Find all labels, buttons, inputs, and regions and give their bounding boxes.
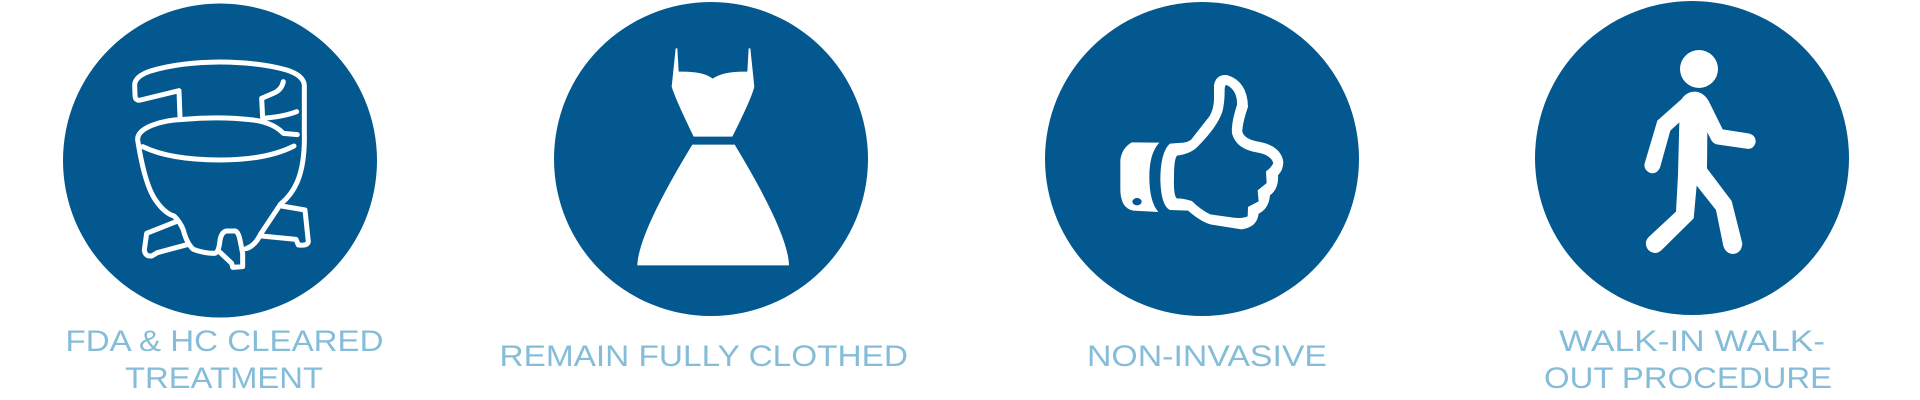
icon circle: clothed xyxy=(554,2,868,316)
icon: walking person xyxy=(1644,50,1756,254)
label: remain fully clothed: REMAIN FULLY CLOTHED xyxy=(500,340,908,373)
panel: remain fully clothed xyxy=(500,2,908,373)
label: FDA and HC cleared treatment xyxy=(66,325,384,395)
icon: treatment applicator outline xyxy=(135,62,308,267)
panel: walk-in walk-out procedure xyxy=(1535,1,1849,395)
label: non-invasive: NON-INVASIVE xyxy=(1087,340,1327,373)
label: walk-in walk-out procedure xyxy=(1544,325,1832,395)
icon: thumbs up xyxy=(1120,76,1283,229)
label: walk-in walk-out procedure: OUT PROCEDURE xyxy=(1544,362,1832,395)
icon circle: FDA xyxy=(63,4,377,318)
panel: non-invasive xyxy=(1045,2,1359,373)
icon: dress xyxy=(637,48,789,265)
label: FDA and HC cleared treatment: TREATMENT xyxy=(125,362,323,395)
panel: FDA and HC cleared treatment xyxy=(63,4,384,395)
label: FDA and HC cleared treatment: FDA & HC CLEARED xyxy=(66,325,384,358)
icon circle: non-invasive xyxy=(1045,2,1359,316)
icon circle: walk-in xyxy=(1535,1,1849,315)
label: walk-in walk-out procedure: WALK-IN WALK- xyxy=(1559,325,1825,358)
